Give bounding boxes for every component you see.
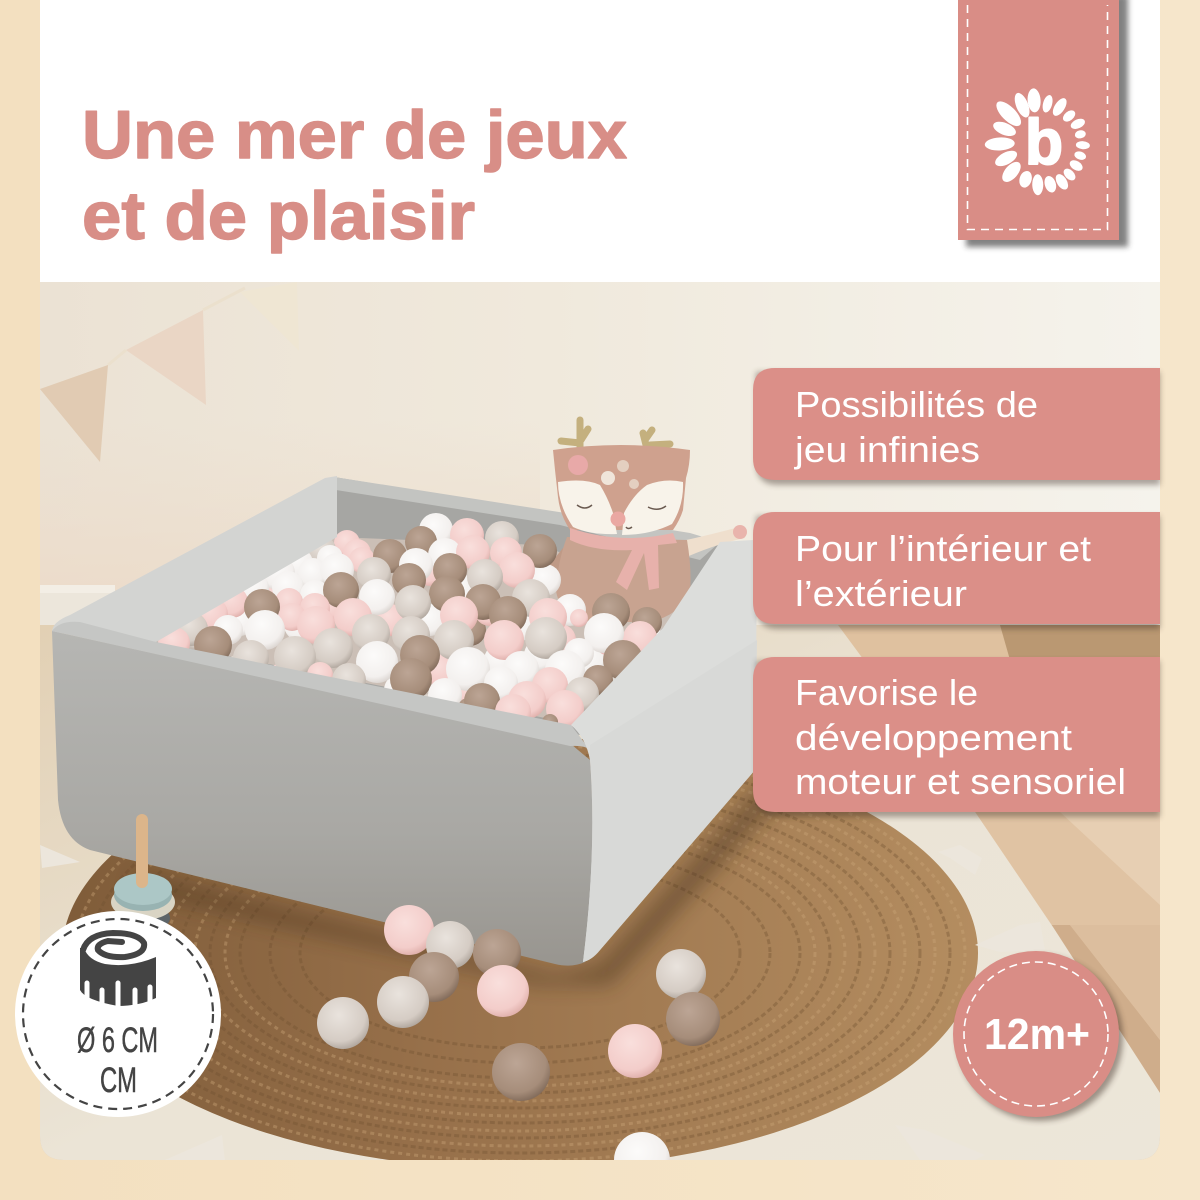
deer body	[556, 537, 691, 622]
baseboard	[40, 585, 115, 628]
panel: feature pill 2	[753, 512, 1160, 629]
deer left arm	[550, 548, 563, 571]
title: Une mer de jeux	[82, 97, 627, 173]
pit shadow on rug	[130, 785, 780, 985]
title: et de plaisir	[82, 178, 475, 254]
rug tassels	[40, 845, 978, 946]
bunting garland	[40, 287, 246, 462]
wall	[40, 282, 1160, 630]
panel: feature pill 3	[753, 657, 1160, 817]
title	[82, 97, 627, 254]
deer nose	[610, 512, 626, 526]
left rim	[52, 476, 337, 642]
panel: feature pill 1: jeu infinies	[794, 429, 980, 470]
ball pit interior	[150, 477, 750, 735]
plush deer toy	[533, 420, 747, 622]
loose balls on rug	[317, 905, 720, 1188]
tag shadow	[966, 0, 1128, 247]
tag stitching	[968, 5, 1108, 230]
panel: feature pill 1	[753, 368, 1160, 485]
deer head	[553, 445, 690, 530]
tag body	[958, 0, 1119, 240]
deer eyes	[577, 505, 666, 528]
photo: ball pit in a nursery	[40, 282, 1160, 1188]
panel: feature pill 2: l’extérieur	[795, 573, 967, 614]
panel: feature pill 3: Favorise le	[795, 672, 978, 713]
front face	[52, 631, 593, 966]
deer scarf	[570, 528, 677, 590]
icon: sunflower logo: b	[1025, 106, 1063, 178]
deer antlers	[561, 420, 670, 453]
ball pit foam walls	[52, 476, 757, 966]
filler balls under the pile	[191, 564, 660, 701]
coloured balls in pit	[158, 513, 662, 730]
deer right arm	[686, 525, 747, 556]
ball size badge	[15, 911, 221, 1117]
age badge: 12m+	[984, 1010, 1090, 1059]
deer face	[558, 481, 683, 535]
white header panel	[40, 0, 1160, 283]
ball size badge: CM	[100, 1061, 137, 1100]
ring stacking toy	[111, 814, 175, 932]
cream rug	[40, 625, 1160, 1165]
panel: feature pill 2: Pour l’intérieur et	[795, 528, 1091, 569]
right face	[571, 540, 757, 962]
logo tag	[958, 0, 1128, 247]
deer forehead spots and flower	[568, 455, 639, 489]
size label: Ø 6 CM	[77, 1021, 158, 1060]
panel: feature pill 1: Possibilités de	[795, 384, 1038, 425]
wood floor	[838, 625, 1160, 1160]
age badge	[953, 951, 1123, 1121]
front rim	[52, 622, 590, 750]
icon: sunflower logo	[984, 88, 1090, 195]
round jute rug	[62, 737, 978, 1169]
icon: measuring tape roll	[80, 933, 156, 1010]
panel: feature pill 3: développement	[795, 717, 1072, 758]
panel: feature pill 3: moteur et sensoriel	[795, 761, 1126, 802]
